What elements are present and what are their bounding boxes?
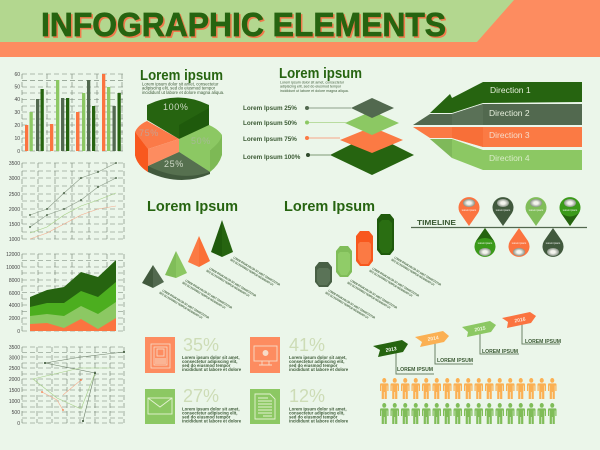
stat: 35%: 35% bbox=[183, 335, 219, 355]
text block: pie chart: adipiscing elit, sed do eiusmod tempor bbox=[142, 86, 216, 90]
line chart: 3500 bbox=[9, 161, 20, 167]
pyramid captions: LOREM IPSUM DOLOR SIT AMET CONSECTETUR bbox=[184, 278, 233, 310]
area chart: 12000 bbox=[6, 252, 20, 258]
3D pie chart bbox=[135, 98, 222, 180]
area chart: 2000 bbox=[9, 316, 20, 322]
stat: 12%: sed do eiusmod tempor bbox=[289, 414, 338, 420]
pin: down orange bbox=[509, 228, 530, 257]
stat: 27% bbox=[145, 386, 242, 424]
area chart: 6000 bbox=[9, 291, 20, 297]
layer labels: Lorem Ipsum 100% bbox=[243, 154, 301, 161]
line chart: 1500 bbox=[9, 222, 20, 228]
flag: 2013 bbox=[373, 340, 434, 374]
stat: 35% bbox=[145, 335, 242, 373]
flag: 2014: 2014 bbox=[427, 335, 439, 343]
scatter line chart: 1500 bbox=[9, 388, 20, 394]
label: 75%: 75% bbox=[139, 128, 159, 138]
heading: layers: Lorem ipsum bbox=[279, 65, 362, 82]
stat: 27%: incididunt ut labore et dolore bbox=[182, 418, 242, 424]
flag: 2016 bbox=[502, 312, 561, 345]
pin: orange: Lorem ipsum bbox=[462, 209, 476, 212]
stat: 27%: Lorem ipsum dolor sit amet, bbox=[182, 406, 240, 412]
pyramid captions: SED DO EIUSMOD TEMPOR INCIDIDUNT UT bbox=[229, 258, 274, 287]
people row: green bbox=[380, 403, 556, 424]
pin: down orange: Lorem ipsum bbox=[512, 242, 526, 245]
stat: 35%: incididunt ut labore et dolore bbox=[182, 367, 242, 372]
pyramid captions: SED DO EIUSMOD TEMPOR INCIDIDUNT UT bbox=[181, 281, 226, 310]
flag: 2014: LOREM IPSUM bbox=[437, 358, 473, 364]
bar chart bbox=[14, 72, 124, 155]
arrow: direction 4 bbox=[430, 139, 582, 170]
stat: 12% bbox=[250, 386, 349, 424]
slice: 75% bbox=[135, 121, 179, 172]
arrow: direction 2 bbox=[413, 104, 582, 125]
bar chart: 40 bbox=[14, 97, 20, 103]
title: INFOGRAPHIC ELEMENTS bbox=[42, 8, 448, 44]
bar chart: 50 bbox=[14, 84, 20, 90]
pin: orange bbox=[459, 197, 480, 226]
timeline heading: TIMELINE bbox=[417, 218, 456, 227]
label: 100%: 100% bbox=[163, 102, 188, 112]
arrow: direction 3: Direction 3 bbox=[489, 130, 530, 140]
pyramid captions: LOREM IPSUM DOLOR SIT AMET CONSECTETUR bbox=[208, 266, 257, 298]
heading: pie chart: Lorem ipsum bbox=[140, 67, 223, 84]
icon: monitor bbox=[254, 346, 277, 365]
arrow: direction 3 bbox=[413, 127, 582, 147]
stat: 41%: sed do eiusmod tempor bbox=[289, 363, 338, 368]
scatter line chart: 500 bbox=[12, 410, 20, 416]
label: 50%: 50% bbox=[191, 136, 211, 146]
bar chart: 0 bbox=[17, 149, 20, 155]
pyramid captions: SED DO EIUSMOD TEMPOR INCIDIDUNT UT bbox=[205, 269, 250, 298]
crystal captions: SED DO EIUSMOD TEMPOR INCIDIDUNT UT bbox=[346, 281, 391, 310]
flag: 2013: LOREM IPSUM bbox=[397, 367, 433, 373]
stat: 12%: incididunt ut labore et dolore bbox=[289, 418, 349, 424]
header banner bbox=[0, 0, 600, 57]
pyramid captions: SED DO EIUSMOD TEMPOR INCIDIDUNT UT bbox=[158, 291, 203, 320]
flag: 2014 bbox=[415, 331, 473, 364]
crystal captions: SED DO EIUSMOD TEMPOR INCIDIDUNT UT bbox=[390, 258, 435, 287]
slice: 100% bbox=[147, 98, 209, 139]
stat: 12%: consectetur adipiscing elit, bbox=[289, 410, 344, 416]
text block: layers bbox=[280, 80, 349, 93]
layer labels: Lorem Ipsum 50% bbox=[243, 120, 297, 127]
area chart: 4000 bbox=[9, 303, 20, 309]
crystal captions: LOREM IPSUM DOLOR SIT AMET CONSECTETUR bbox=[371, 266, 420, 298]
scatter line chart: 3000 bbox=[9, 356, 20, 362]
pyramids bbox=[142, 220, 233, 288]
title: INFOGRAPHIC ELEMENTS bbox=[41, 6, 446, 43]
stat: 12%: 12% bbox=[289, 386, 325, 406]
pyramid captions: LOREM IPSUM DOLOR SIT AMET CONSECTETUR bbox=[161, 288, 210, 320]
text block: layers: adipiscing elit, sed do eiusmod tempor bbox=[280, 84, 342, 88]
layer labels bbox=[243, 105, 351, 161]
pyramid captions: LOREM IPSUM DOLOR SIT AMET CONSECTETUR bbox=[232, 255, 281, 287]
flag: 2016: 2016 bbox=[514, 317, 526, 324]
pin: down grey: Lorem ipsum bbox=[546, 242, 560, 245]
text block: pie chart: incididunt ut labore et dolore magna aliqua. bbox=[142, 90, 224, 95]
layer labels: Lorem Ipsum 25% bbox=[243, 105, 297, 112]
crystal captions: LOREM IPSUM DOLOR SIT AMET CONSECTETUR bbox=[393, 255, 442, 287]
bar chart: 30 bbox=[14, 110, 20, 116]
stat: 41%: Lorem ipsum dolor sit amet, bbox=[289, 355, 347, 360]
line chart: 2000 bbox=[9, 207, 20, 213]
flag: 2016: LOREM IPSUM bbox=[525, 339, 561, 345]
stat: 41%: consectetur adipiscing elit, bbox=[289, 359, 344, 364]
area chart: 8000 bbox=[9, 278, 20, 284]
bar chart: 60 bbox=[14, 72, 20, 78]
stat: 35%: consectetur adipiscing elit, bbox=[182, 359, 237, 364]
stat: 12%: Lorem ipsum dolor sit amet, bbox=[289, 406, 347, 412]
heading: pyramids: Lorem Ipsum bbox=[147, 198, 238, 215]
scatter line chart: 2000 bbox=[9, 377, 20, 383]
crystal captions: SED DO EIUSMOD TEMPOR INCIDIDUNT UT bbox=[324, 291, 369, 320]
arrow: direction 2: Direction 2 bbox=[489, 108, 530, 118]
timeline bbox=[411, 197, 587, 257]
label: 25%: 25% bbox=[164, 159, 184, 169]
scatter line chart: 2500 bbox=[9, 366, 20, 372]
bar chart: 10 bbox=[14, 136, 20, 142]
bar chart: 20 bbox=[14, 123, 20, 129]
stat: 27%: sed do eiusmod tempor bbox=[182, 414, 231, 420]
pin: down green: Lorem ipsum bbox=[478, 242, 492, 245]
pin: down grey bbox=[543, 228, 564, 257]
pin: green: Lorem ipsum bbox=[563, 209, 577, 212]
stat: 27%: consectetur adipiscing elit, bbox=[182, 410, 237, 416]
pin: light green: Lorem ipsum bbox=[529, 209, 543, 212]
area chart: 0 bbox=[17, 329, 20, 335]
area chart bbox=[6, 252, 124, 335]
scatter line chart: 1000 bbox=[9, 399, 20, 405]
stat: 35%: Lorem ipsum dolor sit amet, bbox=[182, 355, 240, 360]
layered diamonds bbox=[330, 98, 414, 175]
area chart: 10000 bbox=[6, 265, 20, 271]
direction arrows bbox=[413, 82, 582, 170]
arrow: direction 4: Direction 4 bbox=[489, 153, 530, 163]
layer labels: Lorem Ipsum 75% bbox=[243, 136, 297, 143]
line chart bbox=[9, 161, 124, 243]
text block: layers: Lorem ipsum dolor sit amet, consectetur bbox=[280, 80, 345, 84]
stat: 41% bbox=[250, 335, 349, 373]
pyramid captions bbox=[158, 255, 281, 323]
stat: 35%: sed do eiusmod tempor bbox=[182, 363, 231, 368]
slice: 25% bbox=[148, 152, 210, 180]
pin: grey bbox=[493, 197, 514, 226]
stat: 41%: 41% bbox=[289, 335, 325, 355]
people row: orange bbox=[380, 378, 556, 399]
stat: 27%: 27% bbox=[183, 386, 219, 406]
crystal captions: SED DO EIUSMOD TEMPOR INCIDIDUNT UT bbox=[368, 269, 413, 298]
crystal captions: LOREM IPSUM DOLOR SIT AMET CONSECTETUR bbox=[327, 288, 376, 320]
slice: 50% bbox=[179, 125, 222, 172]
flag: 2015 bbox=[462, 321, 519, 355]
icon: document bbox=[255, 394, 275, 419]
arrow: direction 1 bbox=[430, 82, 582, 113]
icon: envelope bbox=[148, 398, 172, 414]
stat: 41%: incididunt ut labore et dolore bbox=[289, 367, 349, 372]
scatter line chart: 0 bbox=[17, 421, 20, 427]
arrow: direction 1: Direction 1 bbox=[490, 85, 531, 95]
flag: 2015: LOREM IPSUM bbox=[482, 349, 518, 355]
pin: down green bbox=[474, 228, 496, 257]
line chart: 1000 bbox=[9, 237, 20, 243]
text block: pie chart bbox=[142, 82, 224, 95]
text block: pie chart: Lorem ipsum dolor sit amet, consectetur bbox=[142, 82, 219, 86]
crystal captions bbox=[324, 255, 442, 323]
line chart: 3000 bbox=[9, 176, 20, 182]
crystals bbox=[315, 214, 394, 287]
crystal captions: LOREM IPSUM DOLOR SIT AMET CONSECTETUR bbox=[349, 278, 398, 310]
scatter line chart: 3500 bbox=[9, 345, 20, 351]
pin: light green bbox=[526, 197, 546, 226]
line chart: 2500 bbox=[9, 192, 20, 198]
pin: green bbox=[559, 197, 580, 226]
text block: layers: incididunt ut labore et dolore magna aliqua. bbox=[280, 89, 349, 93]
heading: crystals: Lorem Ipsum bbox=[284, 198, 375, 215]
flag: 2015: 2015 bbox=[474, 326, 486, 333]
scatter line chart bbox=[9, 345, 125, 427]
icon: frame bbox=[151, 344, 170, 368]
pin: grey: Lorem ipsum bbox=[496, 209, 510, 212]
flag: 2013: 2013 bbox=[385, 346, 397, 354]
